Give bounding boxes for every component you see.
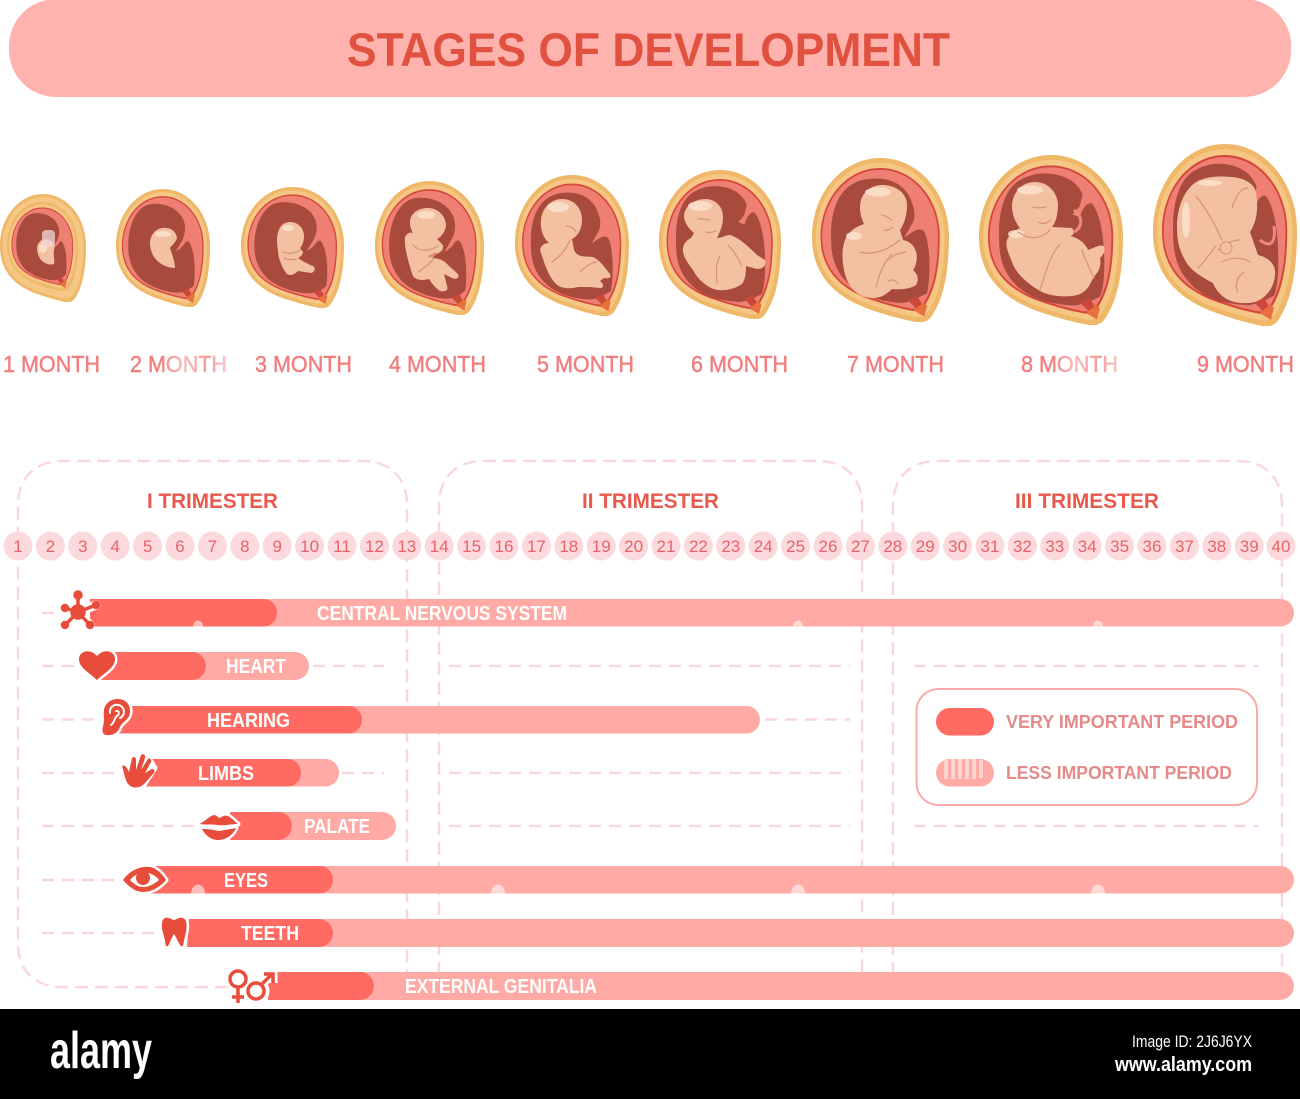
- bar: limbs: LIMBS: [198, 763, 254, 785]
- icon: eye: [123, 867, 166, 892]
- week number row: 34: [1078, 537, 1097, 556]
- legend: [916, 689, 1257, 805]
- month labels: 3 MONTH: [255, 351, 352, 377]
- week number row: 4: [110, 537, 120, 556]
- icon: lips: [199, 815, 238, 840]
- footer image id: Image ID: 2J6J6YX: [1132, 1032, 1252, 1051]
- week number row: 37: [1175, 537, 1194, 556]
- week number row: 17: [527, 537, 546, 556]
- week number row: 12: [365, 537, 384, 556]
- week number row: 16: [495, 537, 513, 556]
- trimester labels: III TRIMESTER: [1015, 490, 1159, 513]
- bar: eyes: EYES: [224, 870, 268, 892]
- month labels: 8 MONTH: [1021, 351, 1118, 377]
- week number row: 11: [333, 537, 351, 556]
- week number row: 23: [721, 537, 740, 556]
- row guide dashes: [42, 613, 1258, 933]
- week number row: 1: [13, 537, 23, 556]
- month 5 illustration: [515, 175, 629, 316]
- trimester labels: II TRIMESTER: [582, 490, 719, 513]
- bar: heart: HEART: [226, 656, 286, 678]
- week number row: 8: [240, 537, 250, 556]
- week number row: 3: [78, 537, 88, 556]
- month 3 illustration: [241, 187, 344, 308]
- legend swatch: less important: [936, 759, 994, 786]
- month labels: [3, 351, 1294, 377]
- bar: heart: [79, 651, 309, 680]
- week number row: 7: [208, 537, 217, 556]
- week number row: 19: [592, 537, 611, 556]
- bar: central nervous system: CENTRAL NERVOUS SYSTEM: [317, 603, 567, 625]
- legend label: very important: VERY IMPORTANT PERIOD: [1006, 711, 1238, 732]
- week number row: 30: [948, 537, 967, 556]
- bar: central nervous system: [62, 592, 1294, 628]
- week number row: 20: [624, 537, 643, 556]
- icon: heart: [79, 651, 115, 680]
- week number row: 27: [851, 537, 870, 556]
- title banner: [9, 0, 1291, 97]
- month labels: 1 MONTH: [3, 351, 100, 377]
- bar: limbs: [122, 754, 339, 787]
- week number row: 6: [175, 537, 185, 556]
- icon: tooth: [162, 918, 187, 946]
- footer logo: alamy: [50, 1022, 152, 1080]
- week number row: 40: [1272, 537, 1290, 556]
- bar: eyes: [123, 866, 1294, 894]
- week number row: 29: [916, 537, 935, 556]
- footer band: [0, 1009, 1300, 1099]
- icon: neuron: [62, 592, 98, 628]
- week number row: 36: [1143, 537, 1161, 556]
- week number row: 24: [754, 537, 773, 556]
- week number row: 14: [430, 537, 449, 556]
- week number row: 26: [819, 537, 837, 556]
- icon: hand: [122, 754, 155, 787]
- month labels: 6 MONTH: [691, 351, 788, 377]
- week number row: 28: [883, 537, 902, 556]
- week number row: 15: [462, 537, 481, 556]
- week number row: 13: [397, 537, 416, 556]
- bar: palate: [199, 812, 396, 840]
- week number row: 32: [1013, 537, 1032, 556]
- week number row: 31: [981, 537, 999, 556]
- week number row: 5: [143, 537, 152, 556]
- trimester frames: [18, 461, 1282, 987]
- month 9 illustration: [1153, 144, 1297, 326]
- bar: teeth: TEETH: [241, 923, 299, 945]
- week number row: 38: [1207, 537, 1226, 556]
- icon: ear: [102, 699, 130, 735]
- week number row: 35: [1110, 537, 1129, 556]
- bar: hearing: HEARING: [207, 710, 290, 732]
- bar: palate: PALATE: [304, 816, 370, 838]
- bar: external genitalia: [230, 971, 1294, 1003]
- month labels: 4 MONTH: [389, 351, 486, 377]
- month 6 illustration: [659, 170, 781, 319]
- bar: external genitalia: EXTERNAL GENITALIA: [405, 976, 597, 998]
- icon: gender symbols: [230, 971, 273, 1003]
- month labels: 5 MONTH: [537, 351, 634, 377]
- week number row: 25: [786, 537, 805, 556]
- week number row: 10: [300, 537, 319, 556]
- month 2 illustration: [116, 189, 210, 307]
- week number row: 21: [657, 537, 675, 556]
- week number row: [4, 532, 1296, 560]
- week number row: 9: [272, 537, 282, 556]
- week number row: 2: [46, 537, 55, 556]
- month labels: 9 MONTH: [1197, 351, 1294, 377]
- bar: hearing: [102, 699, 760, 735]
- week number row: 18: [559, 537, 578, 556]
- footer url: www.alamy.com: [1114, 1054, 1252, 1076]
- month 1 illustration: [0, 194, 86, 302]
- month 4 illustration: [375, 181, 484, 315]
- title: STAGES OF DEVELOPMENT: [347, 23, 950, 76]
- week number row: 22: [689, 537, 708, 556]
- legend label: less important: LESS IMPORTANT PERIOD: [1006, 762, 1232, 783]
- month 8 illustration: [979, 155, 1123, 325]
- month labels: 2 MONTH: [130, 351, 227, 377]
- week number row: 33: [1045, 537, 1064, 556]
- week number row: 39: [1240, 537, 1259, 556]
- month 7 illustration: [812, 158, 949, 322]
- trimester labels: I TRIMESTER: [147, 490, 278, 513]
- legend swatch: very important: [936, 708, 994, 736]
- trimester labels: [147, 490, 1159, 513]
- bar: teeth: [162, 918, 1294, 947]
- month labels: 7 MONTH: [847, 351, 944, 377]
